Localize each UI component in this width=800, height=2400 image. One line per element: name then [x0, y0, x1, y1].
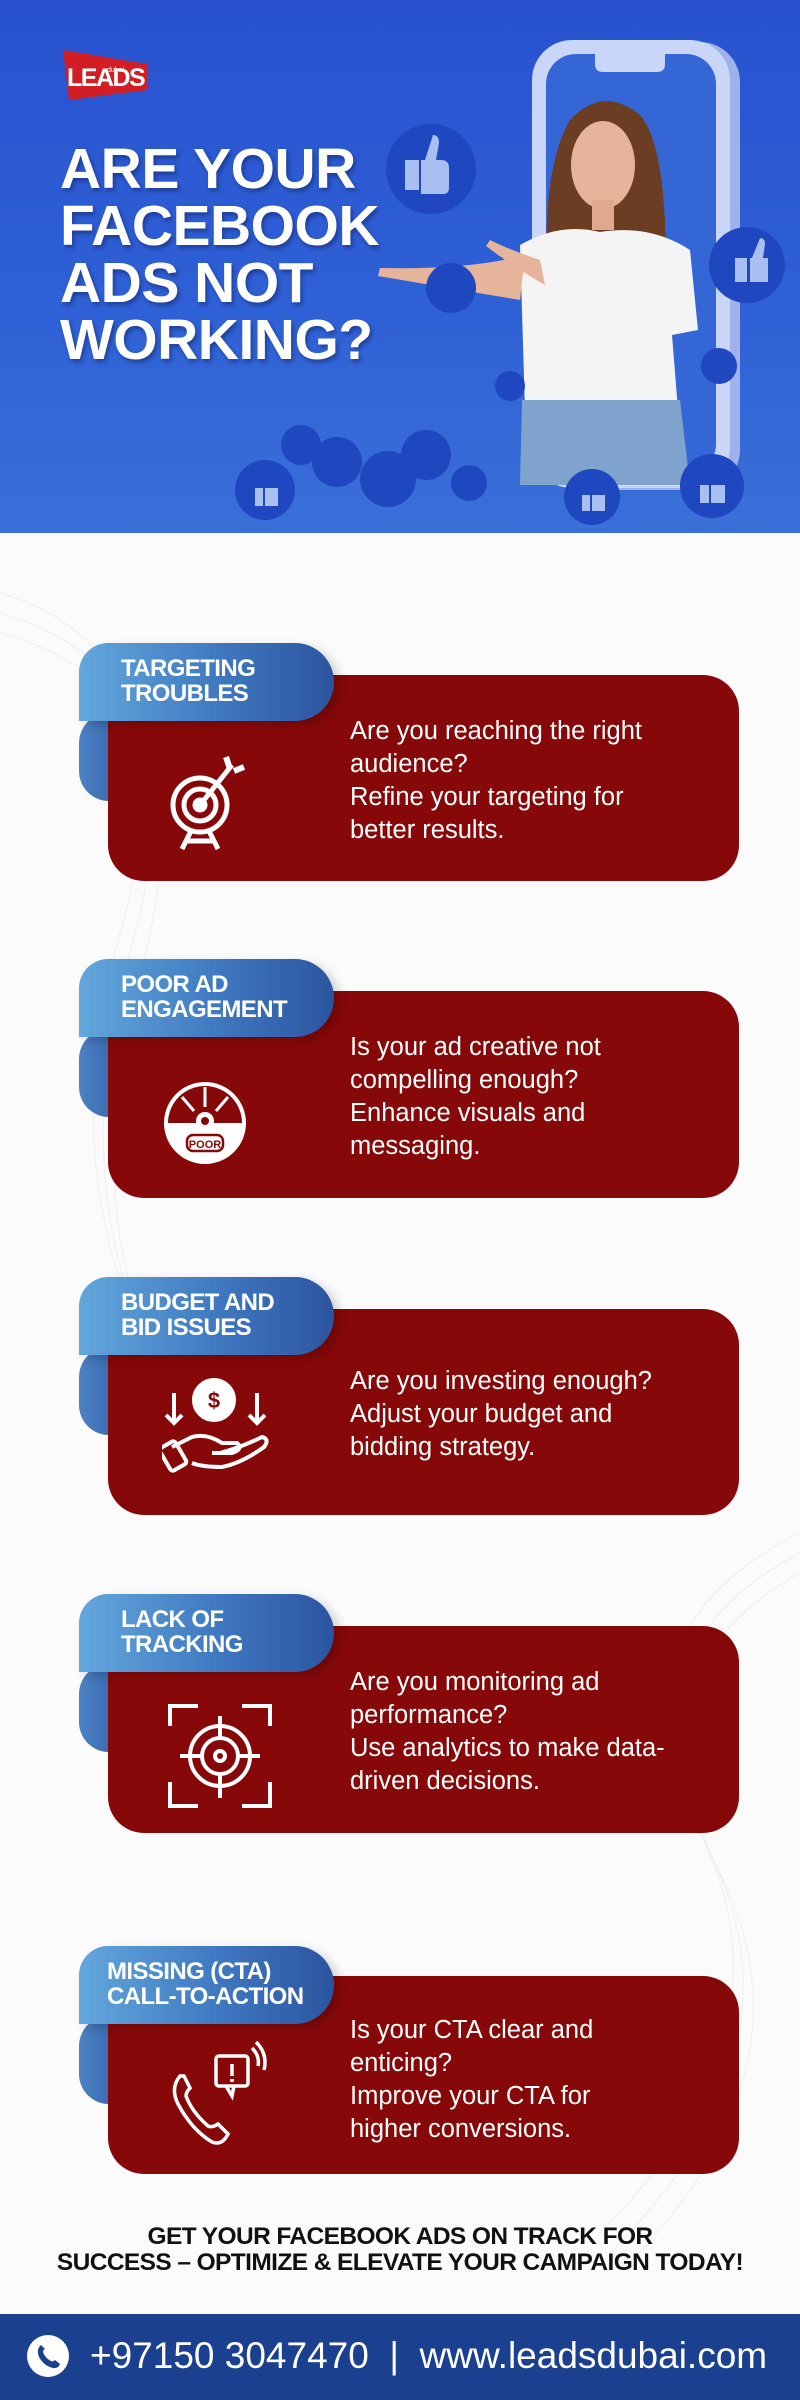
heading: budget and bid issues: BUDGET AND	[121, 1289, 274, 1316]
heading: missing cta: MISSING (CTA)	[107, 1958, 271, 1985]
text: engagement: Enhance visuals and	[350, 1099, 585, 1127]
heading: poor ad engagement: ENGAGEMENT	[121, 996, 287, 1023]
heading: budget and bid issues: BID ISSUES	[121, 1314, 251, 1341]
closing message: GET YOUR FACEBOOK ADS ON TRACK FOR	[147, 2223, 652, 2250]
text: engagement	[350, 1033, 601, 1160]
icon: hand with dollar	[162, 1378, 269, 1473]
text: engagement: compelling enough?	[350, 1066, 578, 1094]
heading: targeting troubles: TARGETING	[121, 655, 255, 682]
title	[60, 137, 382, 372]
logo	[63, 50, 147, 100]
text: tracking: Are you monitoring ad	[350, 1668, 599, 1696]
text: tracking	[350, 1668, 665, 1795]
heading: poor ad engagement	[79, 959, 334, 1037]
panel: budget and bid issues	[79, 1277, 739, 1515]
text: targeting: audience?	[350, 750, 468, 778]
title: ARE YOUR	[60, 137, 356, 201]
text: budget: Are you investing enough?	[350, 1367, 652, 1395]
heading: lack of tracking: TRACKING	[121, 1631, 243, 1658]
title: FACEBOOK	[60, 194, 379, 258]
icon: target with arrow	[170, 756, 246, 850]
closing message: SUCCESS – OPTIMIZE & ELEVATE YOUR CAMPAIGN TODAY!	[57, 2249, 743, 2276]
text: cta: Is your CTA clear and	[350, 2016, 593, 2044]
text: engagement: messaging.	[350, 1132, 480, 1160]
text: targeting: better results.	[350, 816, 504, 844]
heading: targeting troubles: TROUBLES	[121, 680, 248, 707]
phone	[532, 40, 740, 490]
panel: poor ad engagement	[79, 959, 739, 1198]
background wave lines	[0, 592, 800, 2273]
text: cta: higher conversions.	[350, 2115, 571, 2143]
panel: lack of tracking	[79, 1594, 739, 1833]
heading: targeting troubles	[79, 643, 334, 721]
text: targeting	[350, 717, 642, 844]
heading: budget and bid issues	[79, 1277, 334, 1355]
like bubbles	[235, 124, 785, 525]
title: ADS NOT	[60, 251, 313, 315]
text: targeting: Are you reaching the right	[350, 717, 642, 745]
text: tracking: performance?	[350, 1701, 507, 1729]
heading: poor ad engagement: POOR AD	[121, 971, 228, 998]
heading: lack of tracking	[79, 1594, 334, 1672]
text: targeting: Refine your targeting for	[350, 783, 624, 811]
logo: dubai	[107, 67, 125, 74]
icon: hand with dollar: $	[208, 1388, 220, 1413]
woman	[378, 101, 698, 485]
logo: LEADS	[67, 64, 145, 92]
closing message	[57, 2223, 743, 2276]
text: tracking: driven decisions.	[350, 1767, 540, 1795]
heading: missing cta	[79, 1946, 334, 2024]
title: WORKING?	[60, 308, 373, 372]
icon: phone with alert	[172, 2040, 267, 2145]
text: tracking: Use analytics to make data-	[350, 1734, 665, 1762]
icon: poor gauge: POOR	[189, 1139, 221, 1151]
heading: lack of tracking: LACK OF	[121, 1606, 223, 1633]
text: cta: Improve your CTA for	[350, 2082, 590, 2110]
panel: targeting troubles	[79, 643, 739, 881]
text: engagement: Is your ad creative not	[350, 1033, 601, 1061]
heading: missing cta: CALL-TO-ACTION	[107, 1983, 303, 2010]
icon: phone	[27, 2335, 69, 2377]
text: cta: enticing?	[350, 2049, 452, 2077]
panel: missing cta	[79, 1946, 739, 2174]
contact text: +97150 3047470 | www.leadsdubai.com	[90, 2335, 767, 2376]
text: budget: Adjust your budget and	[350, 1400, 612, 1428]
icon: crosshair	[168, 1704, 272, 1808]
header banner	[0, 0, 800, 533]
footer contact bar	[0, 2314, 800, 2400]
text: cta	[350, 2016, 593, 2143]
icon: poor gauge	[164, 1082, 246, 1164]
text: budget	[350, 1367, 652, 1461]
text: budget: bidding strategy.	[350, 1433, 535, 1461]
